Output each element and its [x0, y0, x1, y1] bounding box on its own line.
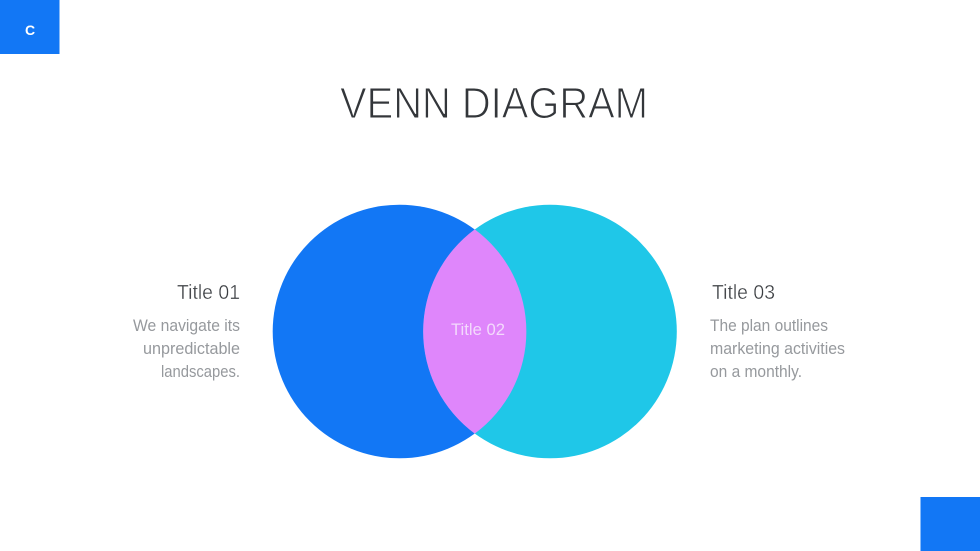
logo tab: top left	[0, 0, 60, 54]
corner block: bottom right	[920, 497, 980, 551]
description: title 03: The plan outlines	[710, 316, 828, 335]
overlap label: Title 02	[451, 321, 505, 339]
description: title 03: on a monthly.	[710, 362, 802, 381]
overlap region	[423, 229, 526, 434]
left circle	[273, 205, 526, 458]
description: title 03	[710, 316, 845, 381]
logo tab: top left: C	[25, 22, 35, 38]
right text block	[710, 282, 845, 381]
description: title 01: landscapes.	[161, 362, 240, 381]
title: VENN DIAGRAM	[340, 79, 648, 128]
left text block	[133, 282, 240, 381]
venn diagram	[273, 205, 677, 458]
description: title 01: We navigate its	[133, 316, 240, 335]
heading: title 03: Title 03	[712, 282, 775, 304]
description: title 01: unpredictable	[143, 339, 240, 358]
right circle	[423, 205, 677, 458]
description: title 03: marketing activities	[710, 339, 845, 358]
heading: title 01: Title 01	[177, 282, 240, 304]
description: title 01	[133, 316, 240, 381]
